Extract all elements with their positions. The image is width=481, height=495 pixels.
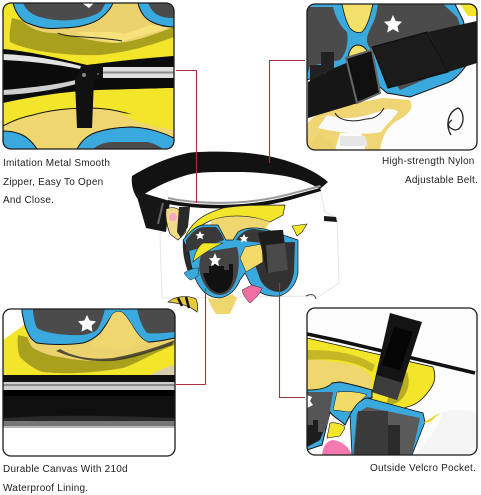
text: canvas caption xyxy=(3,464,128,494)
text: canvas caption: Waterproof Lining. xyxy=(3,483,88,494)
text: belt caption xyxy=(382,156,478,186)
text: zipper caption: Zipper, Easy To Open xyxy=(3,177,103,188)
connector: canvas xyxy=(176,288,206,384)
text: zipper caption: Imitation Metal Smooth xyxy=(3,158,110,169)
text: canvas caption: Durable Canvas With 210d xyxy=(3,464,128,475)
text: velcro pocket caption: Outside Velcro Pocket. xyxy=(370,463,476,474)
belt strap xyxy=(132,152,328,205)
product: belt bag xyxy=(132,152,339,314)
connector: velcro pocket xyxy=(280,283,305,398)
text: belt caption: High-strength Nylon xyxy=(382,156,475,167)
panel: canvas detail xyxy=(3,309,175,456)
connector: zipper xyxy=(176,70,196,203)
panel: zipper detail xyxy=(3,3,174,149)
connector: belt xyxy=(270,60,305,163)
text: zipper caption xyxy=(3,158,110,206)
face edge xyxy=(183,238,198,276)
text: belt caption: Adjustable Belt. xyxy=(405,175,478,186)
panel: adjustable belt detail xyxy=(307,4,477,150)
text: zipper caption: And Close. xyxy=(3,195,54,206)
panel: velcro pocket detail xyxy=(307,308,477,455)
bag body xyxy=(135,185,339,314)
